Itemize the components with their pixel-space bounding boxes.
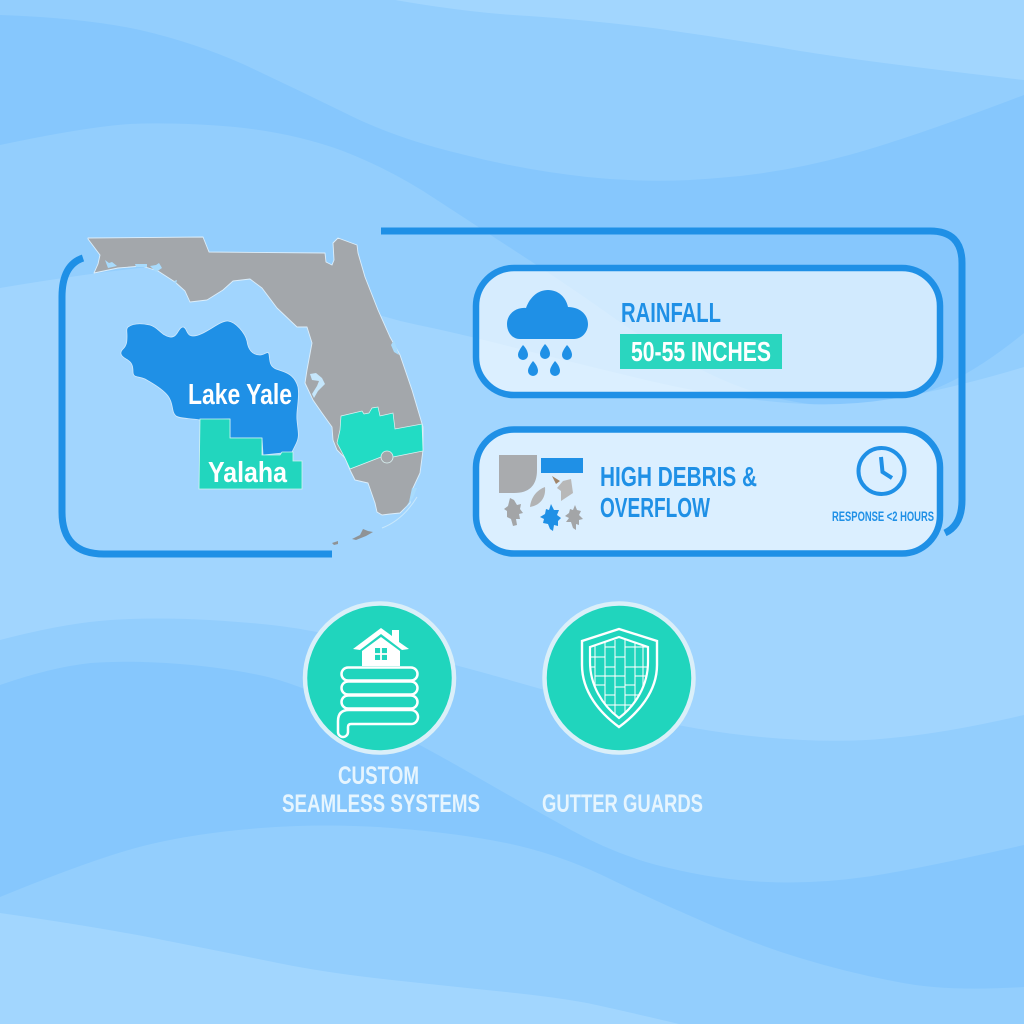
icon: house roof <box>353 628 409 650</box>
icon: guard mesh <box>591 640 647 714</box>
icon: debris in gutter <box>499 455 583 531</box>
icon: shield outer <box>582 629 657 727</box>
badge: custom seamless systems <box>305 604 454 752</box>
icon: rain cloud <box>507 290 588 376</box>
state outline <box>88 237 423 515</box>
icon: coiled seamless gutter <box>338 668 418 737</box>
panel: rainfall <box>476 268 940 395</box>
tampa bay <box>310 373 325 398</box>
badge: gutter guards <box>544 604 694 752</box>
teal circle <box>305 604 454 752</box>
region: southern highlight <box>337 407 423 469</box>
icon: clock <box>858 448 904 494</box>
label: response time: RESPONSE <2 HOURS <box>832 509 934 524</box>
heading: rainfall: RAINFALL <box>621 297 721 328</box>
badge: 50-55 inches <box>620 334 782 369</box>
coastal bays <box>105 260 399 355</box>
region: Yalaha <box>199 419 302 489</box>
frame bracket: left <box>62 258 332 554</box>
label: custom seamless systems: CUSTOM <box>338 762 419 790</box>
map: Florida <box>88 237 423 545</box>
heading: high debris and overflow: OVERFLOW <box>600 492 710 523</box>
label: Lake Yale: Lake Yale <box>188 379 292 411</box>
heading: high debris and overflow: HIGH DEBRIS & <box>600 461 757 492</box>
icon: shield inner <box>590 637 648 718</box>
label: Yalaha: Yalaha <box>208 457 288 489</box>
badge: 50-55 inches: 50-55 INCHES <box>631 336 771 367</box>
east coast water <box>404 488 417 510</box>
florida bay and barrier <box>382 497 417 528</box>
window bars <box>375 648 387 660</box>
label: gutter guards: GUTTER GUARDS <box>542 790 703 818</box>
region: Lake Yale <box>121 321 299 455</box>
inland lake <box>381 451 393 463</box>
florida keys <box>332 529 373 545</box>
frame bracket: top right <box>381 231 962 533</box>
teal circle <box>544 604 694 752</box>
icon: house body <box>362 637 400 666</box>
label: custom seamless systems: SEAMLESS SYSTEMS <box>282 790 480 818</box>
panel: debris and overflow <box>476 430 940 554</box>
